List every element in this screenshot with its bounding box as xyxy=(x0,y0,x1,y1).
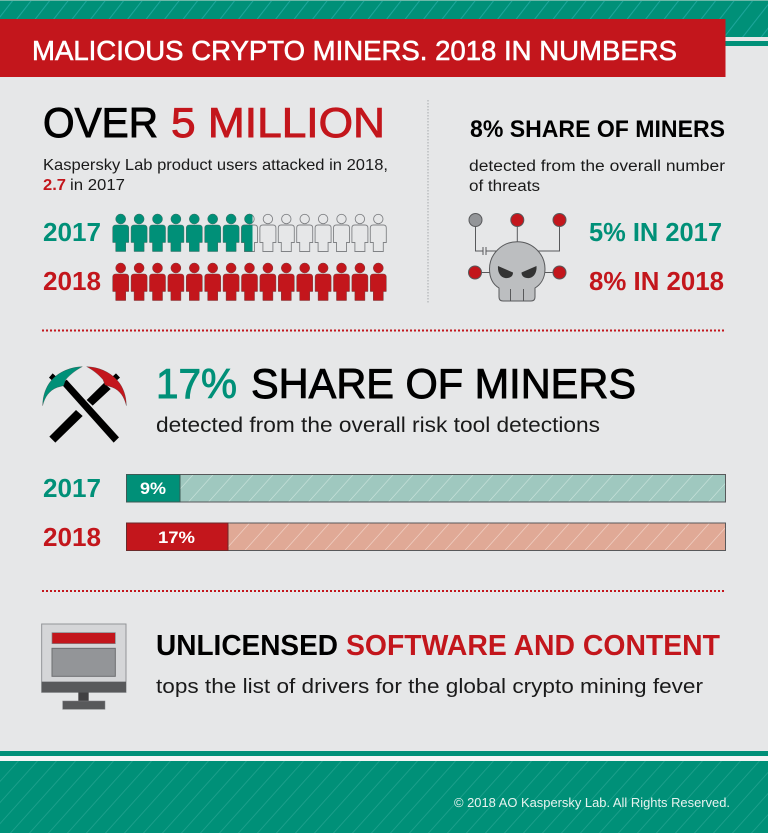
heading: 17% share of miners: SHARE OF MINERS xyxy=(251,360,636,407)
pictogram: 2018 users xyxy=(113,263,386,300)
footer band xyxy=(0,751,768,833)
bar: 2017 9% xyxy=(126,474,726,502)
label: 2018 users: 2018 xyxy=(43,266,101,296)
copyright: © 2018 AO Kaspersky Lab. All Rights Reserved. xyxy=(454,796,730,810)
title banner: MALICIOUS CRYPTO MINERS. 2018 IN NUMBERS xyxy=(32,35,677,66)
pictogram: 2017 users xyxy=(113,214,386,252)
text: users attacked xyxy=(43,157,388,194)
heading: 17% share of miners: 17% xyxy=(156,360,237,407)
text: tops the list: tops the list of drivers for the global crypto mining fever xyxy=(156,676,703,698)
heading: over 5 million: OVER xyxy=(43,99,158,146)
title banner xyxy=(0,19,726,77)
heading: unlicensed software and content: SOFTWARE AND CONTENT xyxy=(346,630,720,662)
text: users attacked: in 2017 xyxy=(70,177,125,194)
heading: 8% share of miners: 8% SHARE OF MINERS xyxy=(470,116,725,143)
text: detected from threats: of threats xyxy=(469,178,540,195)
text: users attacked: 2.7 xyxy=(43,177,66,194)
icon: computer monitor xyxy=(42,624,126,709)
label: 2017 users: 2017 xyxy=(43,217,101,247)
label: 2018 bar: 2018 xyxy=(43,522,101,552)
label: 2017 bar: 2017 xyxy=(43,473,101,503)
stat: 5% in 2017: 5% IN 2017 xyxy=(589,217,722,247)
text: detected from risk tool detections: detected from the overall risk tool detections xyxy=(156,414,600,437)
text: users attacked: Kaspersky Lab product users attacked in 2018, xyxy=(43,157,388,174)
heading: unlicensed software and content: UNLICENSED xyxy=(156,630,338,662)
icon: skull network xyxy=(468,214,566,301)
bar: 2018 17%: 17% xyxy=(158,528,195,547)
heading: over 5 million: 5 MILLION xyxy=(171,99,385,146)
text: detected from threats: detected from the overall number xyxy=(469,158,725,175)
header band xyxy=(0,0,768,46)
heading: unlicensed software and content xyxy=(156,630,720,662)
icon: crossed pickaxes xyxy=(43,367,126,443)
bar: 2017 9%: 9% xyxy=(140,479,166,498)
stat: 8% in 2018: 8% IN 2018 xyxy=(589,266,724,296)
text: detected from threats xyxy=(469,158,725,195)
bar: 2018 17% xyxy=(126,523,726,550)
heading: over 5 million xyxy=(43,99,385,146)
